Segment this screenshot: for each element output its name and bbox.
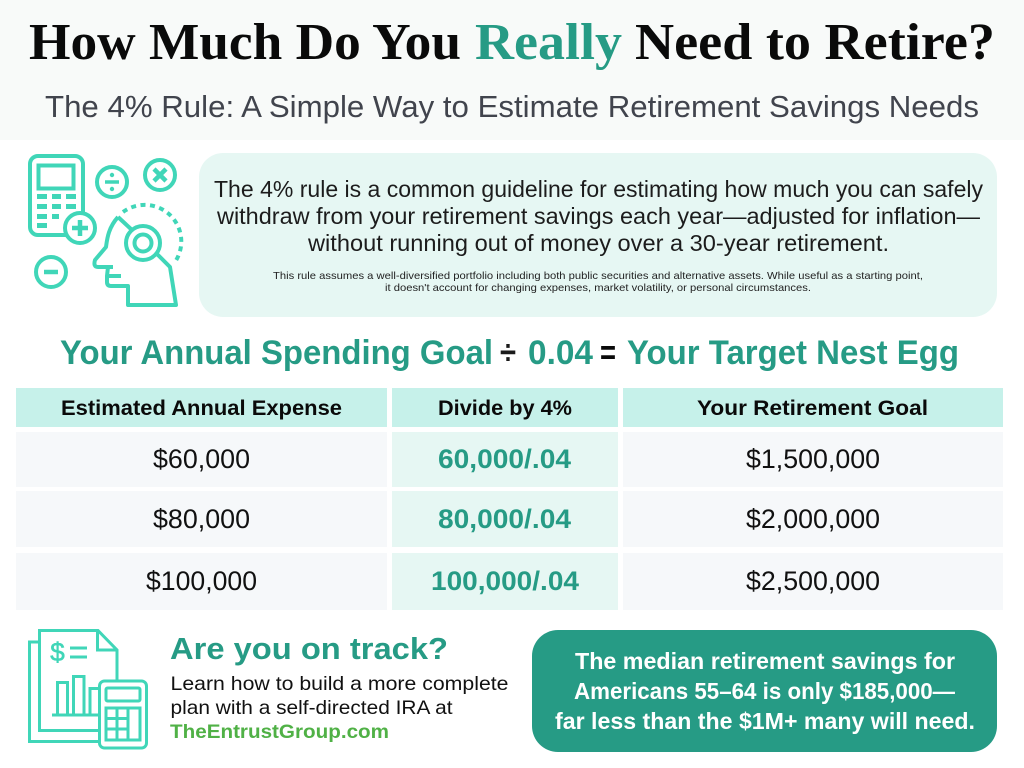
formula heading <box>60 334 959 372</box>
subtitle: The 4% Rule: A Simple Way to Estimate Retirement Savings Needs <box>45 89 979 124</box>
icon: financial document with calculator <box>30 630 146 748</box>
table header row: Estimated Annual Expense <box>61 397 342 420</box>
table row: 100,000 <box>16 553 1003 610</box>
table row: 80,000: $2,000,000 <box>746 504 880 534</box>
icon: calculator and head with math symbols <box>30 156 181 305</box>
table row: 100,000: $100,000 <box>146 566 257 596</box>
table <box>16 388 1003 610</box>
icon: financial document with calculator: $ <box>50 637 65 667</box>
formula heading: = <box>600 334 616 372</box>
fine print: it doesn't account for changing expenses, market volatility, or personal circumstances. <box>385 282 811 294</box>
table row: 100,000: $2,500,000 <box>746 566 880 596</box>
table row: 80,000: $80,000 <box>153 504 250 534</box>
table row: 80,000 <box>16 491 1003 547</box>
formula heading: Your Target Nest Egg <box>627 334 959 372</box>
main explanation text <box>214 176 983 256</box>
call to action heading: Are you on track? <box>170 631 448 666</box>
callout: median savings: The median retirement savings for <box>575 648 955 674</box>
table row: 60,000 <box>16 432 1003 487</box>
main explanation text: The 4% rule is a common guideline for estimating how much you can safely <box>214 176 983 202</box>
table header row: Divide by 4% <box>438 397 572 420</box>
table header row: Your Retirement Goal <box>697 397 928 420</box>
table row: 60,000: 60,000/.04 <box>438 444 571 474</box>
call to action text <box>170 631 508 743</box>
table row: 60,000: $1,500,000 <box>746 444 880 474</box>
formula heading: Your Annual Spending Goal <box>60 334 493 372</box>
call to action body <box>170 673 508 719</box>
callout: median savings <box>532 630 997 752</box>
main explanation text: without running out of money over a 30-year retirement. <box>307 230 889 256</box>
call to action body: Learn how to build a more complete <box>170 673 508 695</box>
fine print: This rule assumes a well-diversified portfolio including both public securities and alternative assets. While useful as a starting point, <box>273 270 923 282</box>
title: Need to Retire? <box>635 14 995 71</box>
table row: 100,000: 100,000/.04 <box>431 566 579 596</box>
table header row <box>16 388 1003 427</box>
callout: median savings: far less than the $1M+ many will need. <box>555 708 975 734</box>
call to action body: plan with a self-directed IRA at <box>170 697 453 719</box>
fine print <box>273 270 923 294</box>
callout: median savings: Americans 55–64 is only $185,000— <box>574 678 955 704</box>
formula heading: ÷ <box>500 334 516 372</box>
website link: TheEntrustGroup.com <box>170 721 389 743</box>
header band <box>0 0 1024 140</box>
formula heading: 0.04 <box>528 334 593 372</box>
title <box>29 14 995 71</box>
table row: 60,000: $60,000 <box>153 444 250 474</box>
table row: 80,000: 80,000/.04 <box>438 504 571 534</box>
panel: rule explanation <box>199 153 997 317</box>
title: Really <box>475 14 622 71</box>
title: How Much Do You <box>29 14 461 71</box>
main explanation text: withdraw from your retirement savings each year—adjusted for inflation— <box>216 203 980 229</box>
